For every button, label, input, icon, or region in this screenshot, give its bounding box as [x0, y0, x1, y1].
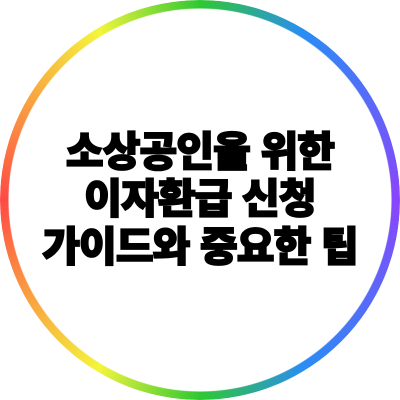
title [42, 128, 358, 270]
title: 소상공인을 위한 [66, 128, 334, 174]
title: 이자환급 신청 [84, 176, 316, 222]
title: 가이드와 중요한 팁 [42, 224, 358, 270]
